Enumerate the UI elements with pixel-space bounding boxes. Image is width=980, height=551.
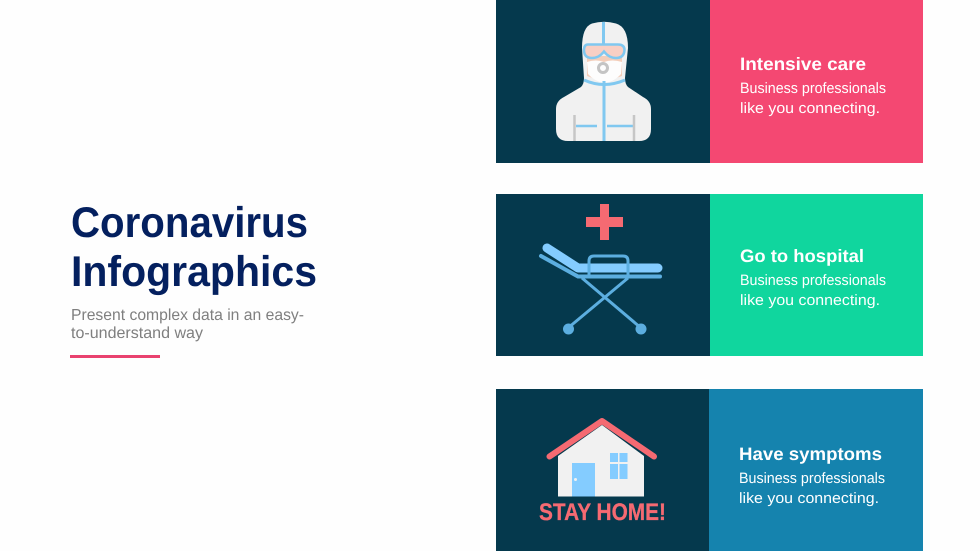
subtitle xyxy=(71,307,304,342)
label: intensive care: like you connecting. xyxy=(740,100,880,117)
icon: stretcher with medical cross xyxy=(541,204,660,334)
subtitle: to-understand way xyxy=(71,325,203,342)
label: have symptoms xyxy=(739,444,885,507)
stay home text: STAY HOME! xyxy=(539,499,666,526)
label: go to hospital: like you connecting. xyxy=(740,292,880,309)
label: go to hospital xyxy=(740,246,886,309)
icon: house xyxy=(550,421,654,496)
title: Infographics xyxy=(71,248,317,296)
panel: intensive care xyxy=(496,0,923,163)
panel: go to hospital xyxy=(496,194,923,356)
label: intensive care: Intensive care xyxy=(740,54,866,74)
label: go to hospital: Go to hospital xyxy=(740,246,864,266)
accent underline xyxy=(70,355,160,358)
title xyxy=(71,199,317,296)
label: intensive care xyxy=(740,54,886,117)
title: Coronavirus xyxy=(71,199,308,247)
label: have symptoms: Business professionals xyxy=(739,470,885,487)
panel: have symptoms xyxy=(496,389,923,551)
subtitle: Present complex data in an easy- xyxy=(71,307,304,324)
label: have symptoms: Have symptoms xyxy=(739,444,882,464)
label: have symptoms: like you connecting. xyxy=(739,490,879,507)
icon: protective suit xyxy=(556,22,651,141)
label: intensive care: Business professionals xyxy=(740,80,886,97)
label: go to hospital: Business professionals xyxy=(740,272,886,289)
